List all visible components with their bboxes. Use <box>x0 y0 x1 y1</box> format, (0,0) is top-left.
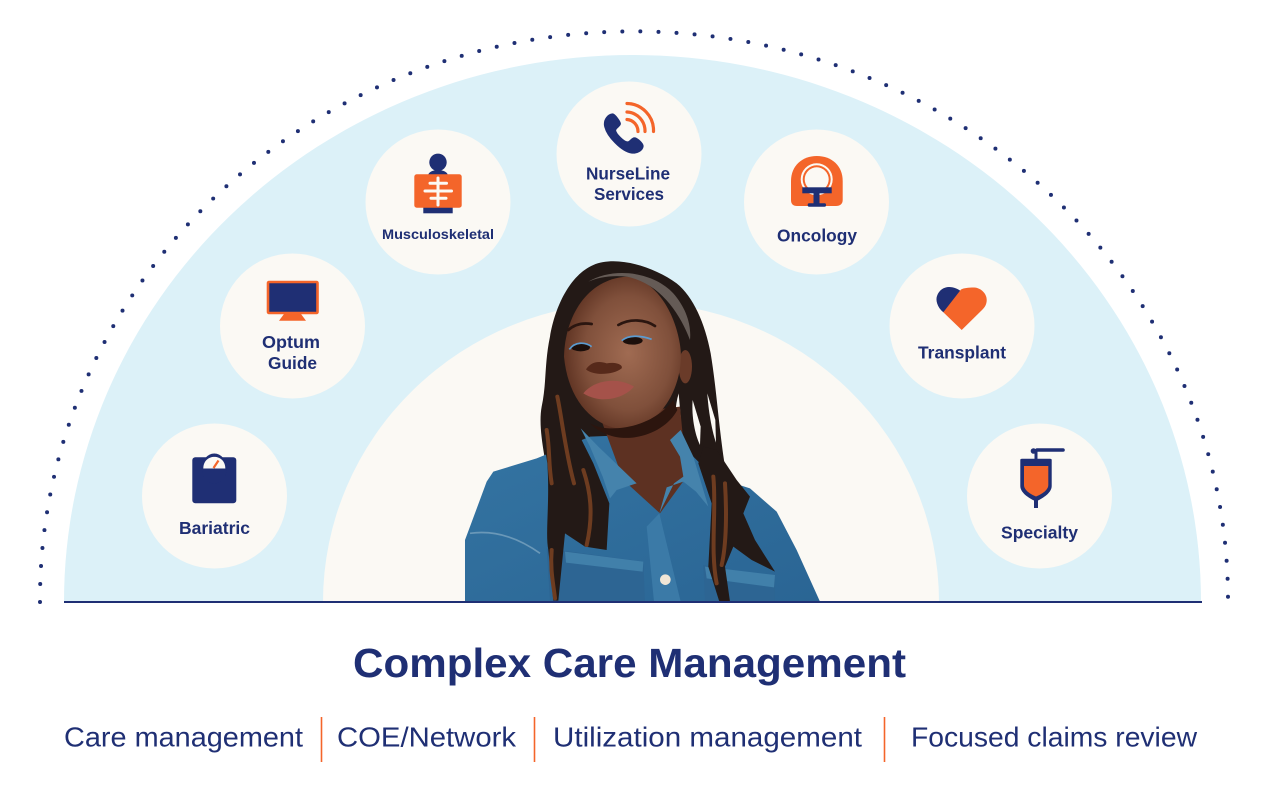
eyes <box>569 336 652 351</box>
brown lock tips <box>547 397 726 598</box>
circle: NurseLine Services <box>556 82 702 226</box>
circle: Transplant <box>890 254 1034 398</box>
collar right <box>659 430 708 513</box>
icon: scale <box>192 454 236 503</box>
separator <box>320 717 322 762</box>
right pocket <box>703 565 775 602</box>
ear <box>679 350 692 383</box>
label: Transplant: Transplant <box>918 343 1006 363</box>
sleeve seam <box>470 532 540 553</box>
photo: smiling woman in denim shirt <box>465 261 820 602</box>
button <box>660 574 671 585</box>
label: Optum Guide: Optum <box>262 332 320 352</box>
item: COE/Network: COE/Network <box>337 722 516 753</box>
collar left <box>581 428 637 498</box>
left pocket <box>547 548 645 602</box>
grey hair streak <box>588 273 690 340</box>
back hair mass <box>541 261 725 490</box>
item: Utilization management: Utilization management <box>553 722 862 753</box>
brows <box>568 320 655 330</box>
label: NurseLine Services: NurseLine <box>586 163 670 183</box>
circle: Optum Guide <box>220 254 365 398</box>
icon: heart <box>936 287 987 330</box>
icon: scanner <box>791 156 843 207</box>
circle: Specialty <box>967 424 1112 568</box>
panel: inner cream semicircle <box>323 302 939 602</box>
face <box>564 277 681 429</box>
shirt placket <box>647 513 681 602</box>
icon: phone with signal <box>604 104 654 153</box>
separator <box>534 717 536 762</box>
dotted outer arc <box>40 31 1228 602</box>
service: Specialty <box>967 424 1112 568</box>
lips <box>583 381 634 399</box>
separator <box>884 717 886 762</box>
label: Specialty: Specialty <box>1001 523 1078 543</box>
left locks over shirt <box>543 407 609 601</box>
service: Optum Guide <box>220 254 365 398</box>
right locks over shirt <box>698 447 775 602</box>
label: Bariatric: Bariatric <box>179 518 250 538</box>
service: Oncology <box>744 130 889 274</box>
circle: Bariatric <box>142 424 287 568</box>
icon: x-ray <box>414 154 462 213</box>
jaw shadow <box>590 400 677 438</box>
service: Bariatric <box>142 424 287 568</box>
service: Musculoskeletal <box>366 130 510 274</box>
label: Optum Guide <box>262 332 320 373</box>
shirt body <box>465 433 820 602</box>
circle: Oncology <box>744 130 889 274</box>
label: Optum Guide: Guide <box>268 353 317 373</box>
service: Transplant <box>890 254 1034 398</box>
nose shadow <box>586 362 622 374</box>
neck and chest <box>600 407 687 513</box>
circle: Musculoskeletal <box>366 130 510 274</box>
label: Musculoskeletal: Musculoskeletal <box>382 226 494 242</box>
icon: IV bag <box>1020 448 1063 508</box>
service: NurseLine Services <box>556 82 702 226</box>
icon: monitor <box>268 282 318 321</box>
item: Focused claims review: Focused claims review <box>911 722 1197 753</box>
title: Complex Care Management <box>353 640 906 686</box>
panel: light blue semicircle <box>64 55 1201 602</box>
label: Oncology: Oncology <box>777 226 857 246</box>
bottom list <box>64 717 1197 762</box>
item: Care management: Care management <box>64 722 303 753</box>
label: NurseLine Services: Services <box>594 184 664 204</box>
label: NurseLine Services <box>586 163 670 204</box>
hair gaps on the right <box>676 393 716 445</box>
baseline rule <box>64 601 1202 603</box>
